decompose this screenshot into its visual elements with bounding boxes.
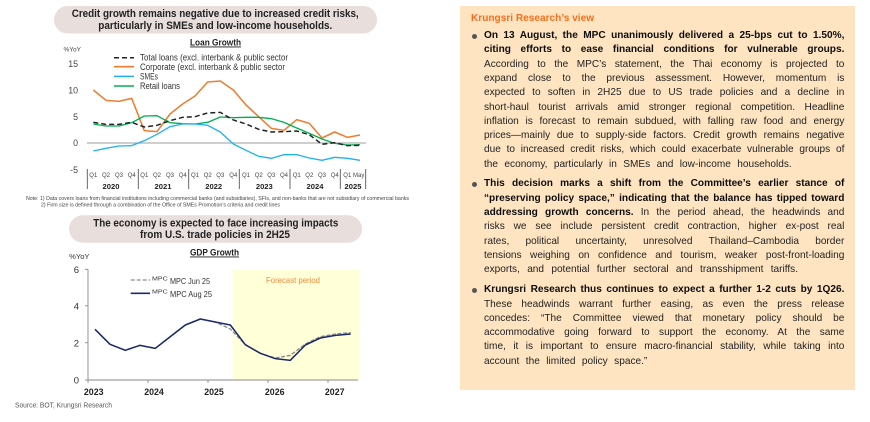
forecast period band: Forecast period (266, 275, 320, 285)
legend: GDP growth (131, 276, 212, 299)
x axis: quarters and years: Q2 (305, 173, 314, 179)
panel: Krungsri Research's view: prices—mainly due to supply-side factors. Credit growth remains negative (484, 130, 844, 141)
legend: GDP growth: MPC (152, 276, 168, 282)
line: total loans (93, 112, 360, 146)
x axis: quarters and years: Q1 (343, 173, 352, 179)
panel: Krungsri Research's view: According to the MPC’s statement, the Thai economy is projected to (484, 59, 844, 70)
x axis: quarters and years: Q1 (242, 173, 251, 179)
y axis: loan growth: 10 (68, 86, 78, 96)
panel: Krungsri Research's view: “preserving policy space,” indicating that the balance has tipped toward (484, 193, 844, 204)
x axis: quarters and years: Q2 (255, 173, 263, 179)
axes: GDP growth: 0 (74, 376, 79, 386)
line: SMEs (93, 124, 360, 160)
axes: GDP growth (69, 252, 358, 397)
x axis: quarters and years: Q3 (166, 173, 175, 179)
bullet 2 (472, 178, 844, 275)
x axis: quarters and years: 2023 (256, 182, 273, 191)
x axis: quarters and years: Q4 (331, 173, 339, 179)
panel: Krungsri Research's view: concedes: “The Committee viewed that monetary policy should be (484, 313, 844, 324)
panel: Krungsri Research's view: citing efforts to ease financial conditions for vulnerable groups. (484, 44, 844, 55)
x axis: quarters and years: Q4 (179, 173, 187, 179)
panel: Krungsri Research's view: expected to soften in 2H25 due to US trade policies and a decline in (484, 87, 844, 98)
legend: loan growth: Retail loans (140, 81, 180, 91)
note: 2) Firm size is defined through a combination of the Office of SMEs Promotion's criteria and credit lines (41, 203, 280, 209)
x axis: quarters and years: Q1 (191, 173, 200, 179)
x axis: quarters and years: Q3 (267, 173, 276, 179)
panel: Krungsri Research's view: addressing growth concerns. In the period ahead, the headwinds and (484, 207, 844, 218)
legend: loan growth: Total loans (excl. interbank & public sector (140, 53, 288, 63)
x axis: quarters and years: May (353, 173, 364, 179)
axes: GDP growth: 2026 (265, 387, 285, 397)
line: MPC Jun 25 (95, 319, 351, 358)
x axis: quarters and years: Q4 (229, 173, 238, 179)
panel: Krungsri Research's view: On 13 August, the MPC unanimously delivered a 25-bps cut to 1.50%, (484, 30, 844, 41)
x axis: quarters and years: Q4 (128, 173, 136, 179)
note (26, 196, 409, 209)
x axis: quarters and years: Q3 (318, 173, 327, 179)
line: retail loans (93, 116, 360, 145)
panel: Krungsri Research's view: short-haul tourist arrivals amid stronger regional competition. Headline (484, 102, 844, 112)
chart title: GDP growth: GDP Growth (190, 248, 239, 258)
heading: credit growth (54, 6, 377, 34)
axes: GDP growth: 2025 (204, 387, 224, 397)
legend: loan growth: Corporate (excl. interbank & public sector (140, 62, 285, 72)
x axis: quarters and years: Q2 (204, 173, 212, 179)
x axis: quarters and years: 2020 (103, 182, 119, 191)
axes: GDP growth: 4 (74, 301, 79, 312)
panel: Krungsri Research's view: time, it is important to ensure macro-financial stability, while taking into (484, 341, 844, 352)
heading: economy: from U.S. trade policies in 2H25 (140, 229, 290, 241)
panel: Krungsri Research's view: exports, and potential further sectoral and transshipment tariffs. (484, 264, 798, 275)
axes: GDP growth: 2027 (325, 387, 345, 397)
bullet 1 (472, 30, 844, 170)
note: Note: 1) Data covers loans from financial institutions including commercial banks (and subsidiaries), SFIs, and non-banks that are not subsidiary of commercial banks (26, 196, 409, 202)
x axis: quarters and years: Q1 (293, 173, 301, 179)
x axis: quarters and years: Q3 (115, 173, 124, 179)
heading: credit growth: particularly in SMEs and low-income households. (98, 20, 332, 32)
panel: Krungsri Research's view: This decision marks a shift from the Committee’s earlier stance of (484, 178, 844, 189)
panel: Krungsri Research's view: expand close to the previous assessment. However, momentum is (484, 73, 844, 84)
heading: economy: The economy is expected to face increasing impacts (93, 217, 338, 229)
legend: loan growth: SMEs (140, 72, 158, 82)
legend: GDP growth: MPC Jun 25 (170, 276, 210, 286)
x axis: quarters and years: Q1 (140, 173, 149, 179)
panel: Krungsri Research's view: risks we see include persistent credit contraction, higher ex-post real (484, 221, 844, 232)
panel heading: Krungsri Research’s view (471, 13, 594, 24)
chart: loan growth (64, 38, 366, 191)
panel: Krungsri Research's view: accommodative going forward to support the economy. At the same (484, 327, 844, 338)
panel: Krungsri Research's view (460, 6, 855, 390)
panel: Krungsri Research's view: rates, political uncertainty, unresolved Thailand–Cambodia border (484, 236, 844, 247)
y axis: loan growth: 5 (73, 112, 78, 122)
x axis: quarters and years: 2025 (345, 182, 362, 191)
x axis: quarters and years: 2021 (155, 182, 172, 191)
y axis: loan growth: -5 (70, 165, 78, 175)
y axis: loan growth: 0 (73, 138, 78, 148)
chart: GDP growth (69, 248, 359, 397)
panel: Krungsri Research's view: These headwinds warrant further easing, as even the press release (484, 298, 844, 310)
panel: Krungsri Research's view: inflation is forecast to remain subdued, with falling raw food and energy (484, 116, 844, 127)
heading: credit growth: Credit growth remains negative due to increased credit risks, (72, 8, 359, 20)
x axis: quarters and years: 2022 (205, 182, 222, 191)
source: Source: BOT, Krungsri Research (15, 400, 112, 410)
panel: Krungsri Research's view: the economy, particularly in SMEs and low-income households. (484, 159, 792, 170)
chart title: loan growth: Loan Growth (190, 38, 241, 48)
x axis: quarters and years: Q2 (102, 173, 111, 179)
bullet 3 (472, 284, 844, 367)
x axis: quarters and years (87, 169, 366, 191)
y axis: loan growth: %YoY (64, 46, 82, 54)
panel: Krungsri Research's view: account the limited policy space.” (484, 356, 647, 367)
panel: Krungsri Research's view: tensions weighing on confidence and tourism, weaker post-front-loading (484, 250, 844, 261)
line: corporate (93, 81, 360, 138)
x axis: quarters and years: 2024 (307, 182, 324, 191)
axes: GDP growth: 2024 (144, 387, 164, 397)
axes: GDP growth: 2023 (84, 387, 104, 397)
axes: GDP growth: %YoY (69, 252, 90, 261)
x axis: quarters and years: Q1 (89, 173, 98, 179)
legend: loan growth (114, 53, 288, 91)
panel: Krungsri Research's view: due to increased credit risks, which could exacerbate vulnerable groups of (484, 144, 844, 155)
line: MPC Aug 25 (95, 319, 351, 360)
legend: GDP growth: MPC (152, 289, 168, 295)
axes: GDP growth: 6 (74, 265, 79, 276)
y axis: loan growth (64, 46, 82, 175)
panel: Krungsri Research's view: Krungsri Research thus continues to expect a further 1-2 cuts by 1Q26. (484, 284, 844, 295)
y axis: loan growth: 15 (68, 59, 78, 69)
heading: economy (69, 215, 362, 243)
x axis: quarters and years: Q3 (216, 173, 225, 179)
x axis: quarters and years: Q2 (153, 173, 162, 179)
legend: GDP growth: MPC Aug 25 (170, 289, 212, 299)
x axis: quarters and years: Q4 (280, 173, 289, 179)
axes: GDP growth: 2 (74, 338, 79, 349)
forecast period band (233, 270, 359, 379)
